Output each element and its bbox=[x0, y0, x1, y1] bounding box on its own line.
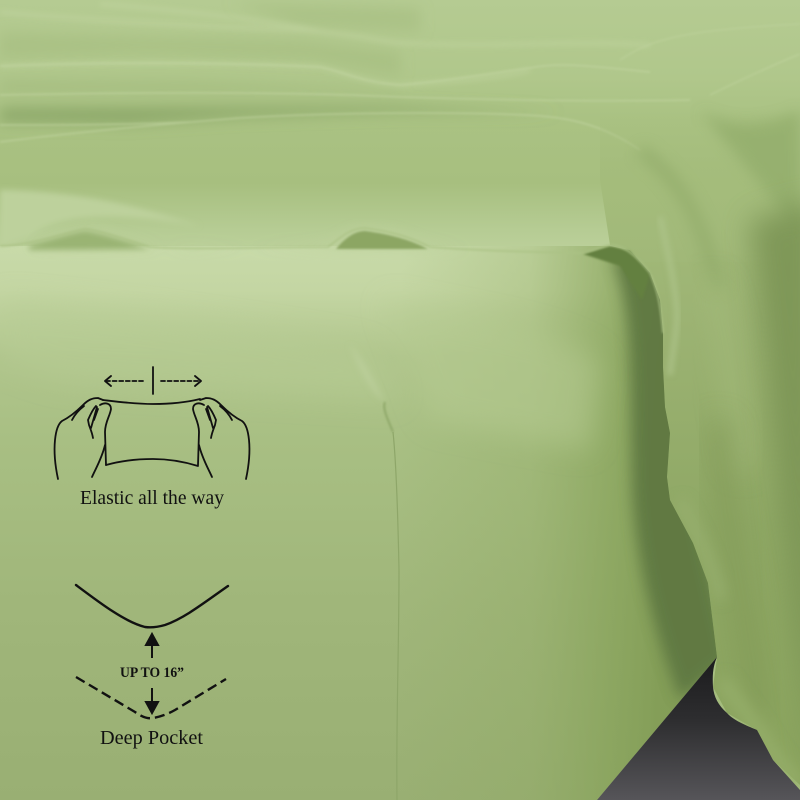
hem flap of top sheet bbox=[0, 190, 663, 333]
corner seam bbox=[350, 345, 399, 800]
top sheet wrinkled surface bbox=[0, 0, 800, 262]
icon: mattress curve dashed bbox=[76, 677, 226, 718]
label: elastic all the way: Elastic all the way bbox=[80, 487, 224, 509]
icon: left hand bbox=[55, 398, 111, 479]
icon: fabric outline bbox=[103, 399, 200, 466]
label: up to 16 inches: UP TO 16” bbox=[120, 665, 184, 681]
icon: fitted curve solid bbox=[76, 585, 228, 627]
icon: deep pocket diagram bbox=[76, 585, 228, 718]
label: deep pocket: Deep Pocket bbox=[100, 727, 203, 749]
icon: stretch arrows bbox=[105, 367, 201, 394]
icon: down arrow bbox=[146, 688, 158, 713]
fitted sheet side shading bbox=[400, 246, 717, 800]
icon: right hand bbox=[193, 398, 249, 479]
icon: up arrow bbox=[146, 634, 158, 658]
fitted sheet body bbox=[0, 246, 717, 800]
dark floor under bed bbox=[597, 657, 800, 800]
icon: hands stretching elastic fabric bbox=[55, 367, 249, 479]
bed edge shadows bbox=[0, 258, 730, 700]
right drape fabric bbox=[600, 90, 800, 800]
